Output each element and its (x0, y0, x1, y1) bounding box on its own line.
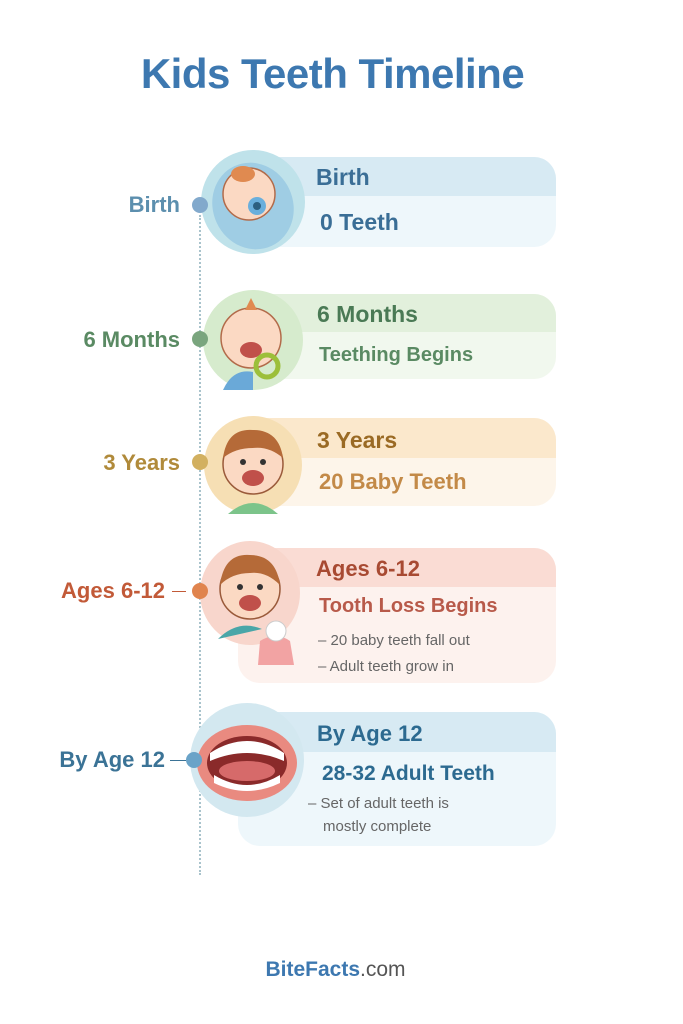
dot birth (192, 197, 208, 213)
label: birth: Birth (129, 192, 180, 217)
card: ages 6-12: – 20 baby teeth fall out (318, 632, 470, 649)
card: 3 years (238, 418, 556, 506)
label: ages 6-12: Ages 6-12 (61, 578, 165, 603)
footer logo: BiteFacts.com (265, 958, 406, 981)
label: 3 years: 3 Years (103, 450, 180, 475)
card: 3 years: 3 Years (317, 427, 397, 453)
card: by age 12: mostly complete (323, 818, 431, 835)
card: birth (238, 157, 556, 247)
card: by age 12: – Set of adult teeth is (308, 795, 449, 812)
card: 3 years: 20 Baby Teeth (319, 469, 467, 494)
card: by age 12: 28-32 Adult Teeth (322, 762, 495, 785)
card: birth: Birth (316, 164, 370, 190)
card: ages 6-12: – Adult teeth grow in (318, 658, 454, 675)
dot 6 months (192, 331, 208, 347)
icon: swaddled baby (201, 150, 305, 254)
dot ages 6-12 (192, 583, 208, 599)
dot 3 years (192, 454, 208, 470)
card: ages 6-12 (238, 548, 556, 683)
title: Kids Teeth Timeline (141, 50, 524, 97)
card: by age 12 (238, 712, 556, 846)
icon: teething baby (203, 290, 303, 390)
dot by age 12 (186, 752, 202, 768)
icon: child with tooth fairy (200, 541, 300, 645)
icon: toddler (204, 416, 302, 514)
label: by age 12: By Age 12 (59, 747, 165, 772)
card: ages 6-12: Ages 6-12 (316, 556, 420, 581)
card: 6 months (238, 294, 556, 379)
label: 6 months: 6 Months (83, 327, 180, 352)
card: 6 months: 6 Months (317, 301, 418, 327)
card: birth: 0 Teeth (320, 209, 399, 235)
card: ages 6-12: Tooth Loss Begins (319, 595, 498, 617)
icon: open mouth (190, 703, 304, 817)
card: by age 12: By Age 12 (317, 721, 423, 746)
card: 6 months: Teething Begins (319, 344, 473, 366)
